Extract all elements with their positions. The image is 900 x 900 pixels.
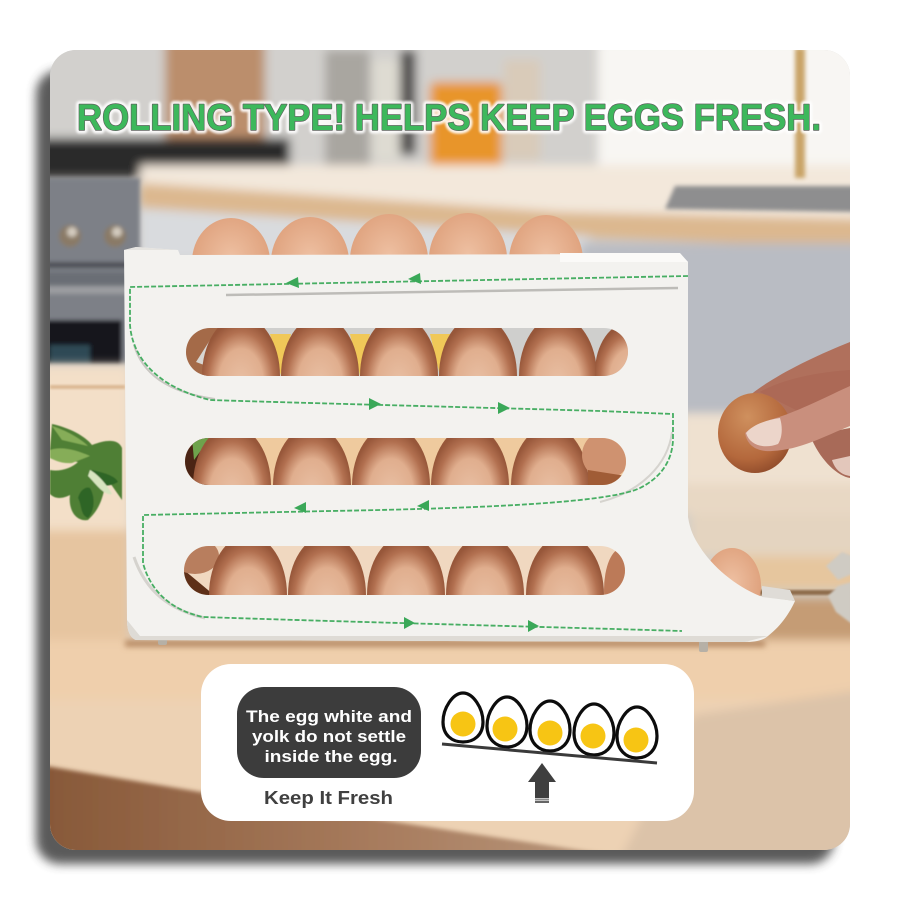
rolling egg tray body [124, 247, 795, 655]
sink and gold faucet [665, 48, 855, 212]
metal clips at right [826, 552, 852, 624]
tray feet [158, 636, 708, 652]
hand holding egg [718, 342, 850, 478]
dark message box [237, 687, 421, 778]
stove front with knobs [40, 178, 140, 364]
dark message box: yolk do not settle [252, 727, 406, 746]
counter and cabinets [140, 165, 860, 225]
title: ROLLING TYPE! HELPS KEEP EGGS FRESH. [77, 97, 821, 138]
dark message box: The egg white and [246, 707, 412, 726]
dark message box: inside the egg. [264, 747, 398, 766]
wooden tabletop [40, 365, 870, 860]
egg row 1 [186, 328, 628, 376]
egg row 2 [185, 438, 626, 485]
up arrow [528, 763, 556, 803]
egg row 3 [184, 546, 625, 595]
wall and curtain [50, 50, 500, 160]
egg cross-section icons [443, 693, 657, 758]
top guide slit [226, 288, 678, 295]
held egg [718, 393, 792, 473]
card drop shadow [36, 70, 834, 864]
egg at exit of tray [703, 548, 761, 624]
arrows [286, 273, 539, 632]
leafy herbs [50, 424, 122, 520]
caption: Keep It Fresh [264, 788, 393, 808]
eggs on top of tray [192, 213, 583, 307]
tray shadow on table [125, 640, 765, 647]
info panel [201, 664, 694, 821]
stove [30, 138, 290, 178]
green dashed rolling path with arrows [130, 273, 688, 632]
tilted shelf line [442, 744, 657, 763]
table front edge [40, 765, 611, 855]
title: ROLLING TYPE! HELPS KEEP EGGS FRESH. [77, 97, 821, 138]
